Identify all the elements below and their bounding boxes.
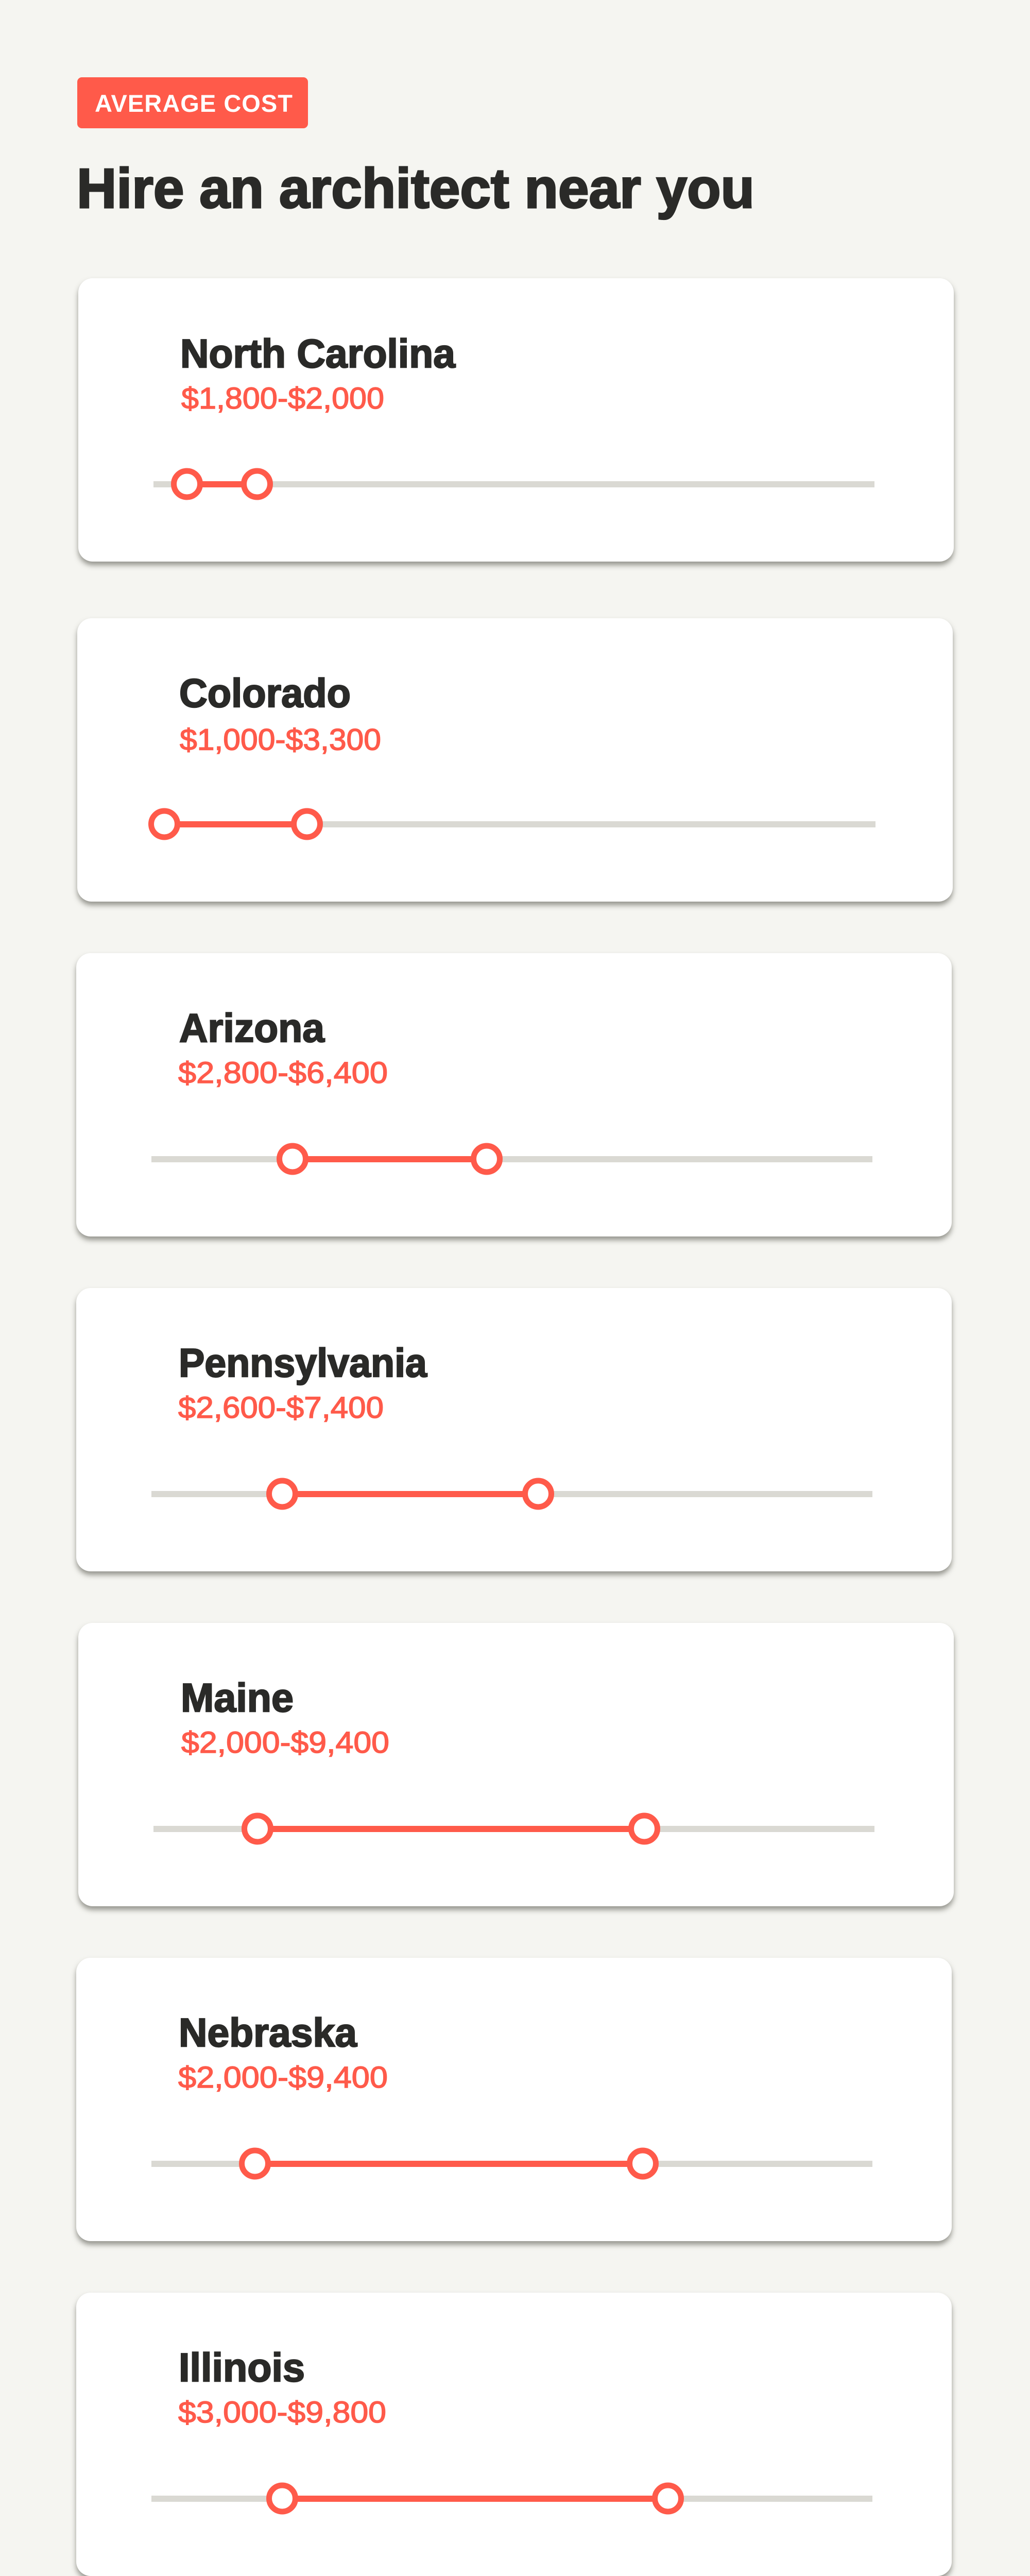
title: Hire an architect near you xyxy=(77,157,754,220)
panel: North Carolina xyxy=(78,278,954,562)
cost range: $1,000-$3,300 xyxy=(180,723,381,756)
panel: Nebraska xyxy=(76,1958,952,2241)
cost range: $2,000-$9,400 xyxy=(181,1726,389,1759)
cost range: $1,800-$2,000 xyxy=(181,382,384,415)
cost range: $2,600-$7,400 xyxy=(178,1391,384,1425)
cost range: $2,000-$9,400 xyxy=(178,2061,388,2094)
range slider xyxy=(153,471,874,497)
state name: Nebraska xyxy=(179,2010,357,2055)
state name: Arizona xyxy=(179,1005,325,1050)
range slider xyxy=(151,2485,872,2512)
panel: Maine xyxy=(78,1623,954,1906)
badge: average cost: AVERAGE COST xyxy=(95,90,293,117)
range slider xyxy=(151,811,876,837)
state name: Colorado xyxy=(179,670,351,716)
cost range: $2,800-$6,400 xyxy=(178,1056,388,1090)
range slider xyxy=(151,1146,872,1172)
state name: Maine xyxy=(181,1675,294,1720)
state name: Illinois xyxy=(179,2345,305,2390)
panel: Illinois xyxy=(76,2293,952,2576)
panel: Colorado xyxy=(77,618,953,902)
panel: Arizona xyxy=(76,953,952,1236)
badge: average cost xyxy=(77,77,308,128)
header: badge and title xyxy=(77,77,754,221)
state name: Pennsylvania xyxy=(179,1340,427,1385)
range slider xyxy=(151,1481,872,1507)
panel: Pennsylvania xyxy=(76,1288,952,1571)
cost range: $3,000-$9,800 xyxy=(178,2396,386,2429)
range slider xyxy=(151,2150,872,2177)
state name: North Carolina xyxy=(180,331,456,376)
range slider xyxy=(153,1816,874,1842)
